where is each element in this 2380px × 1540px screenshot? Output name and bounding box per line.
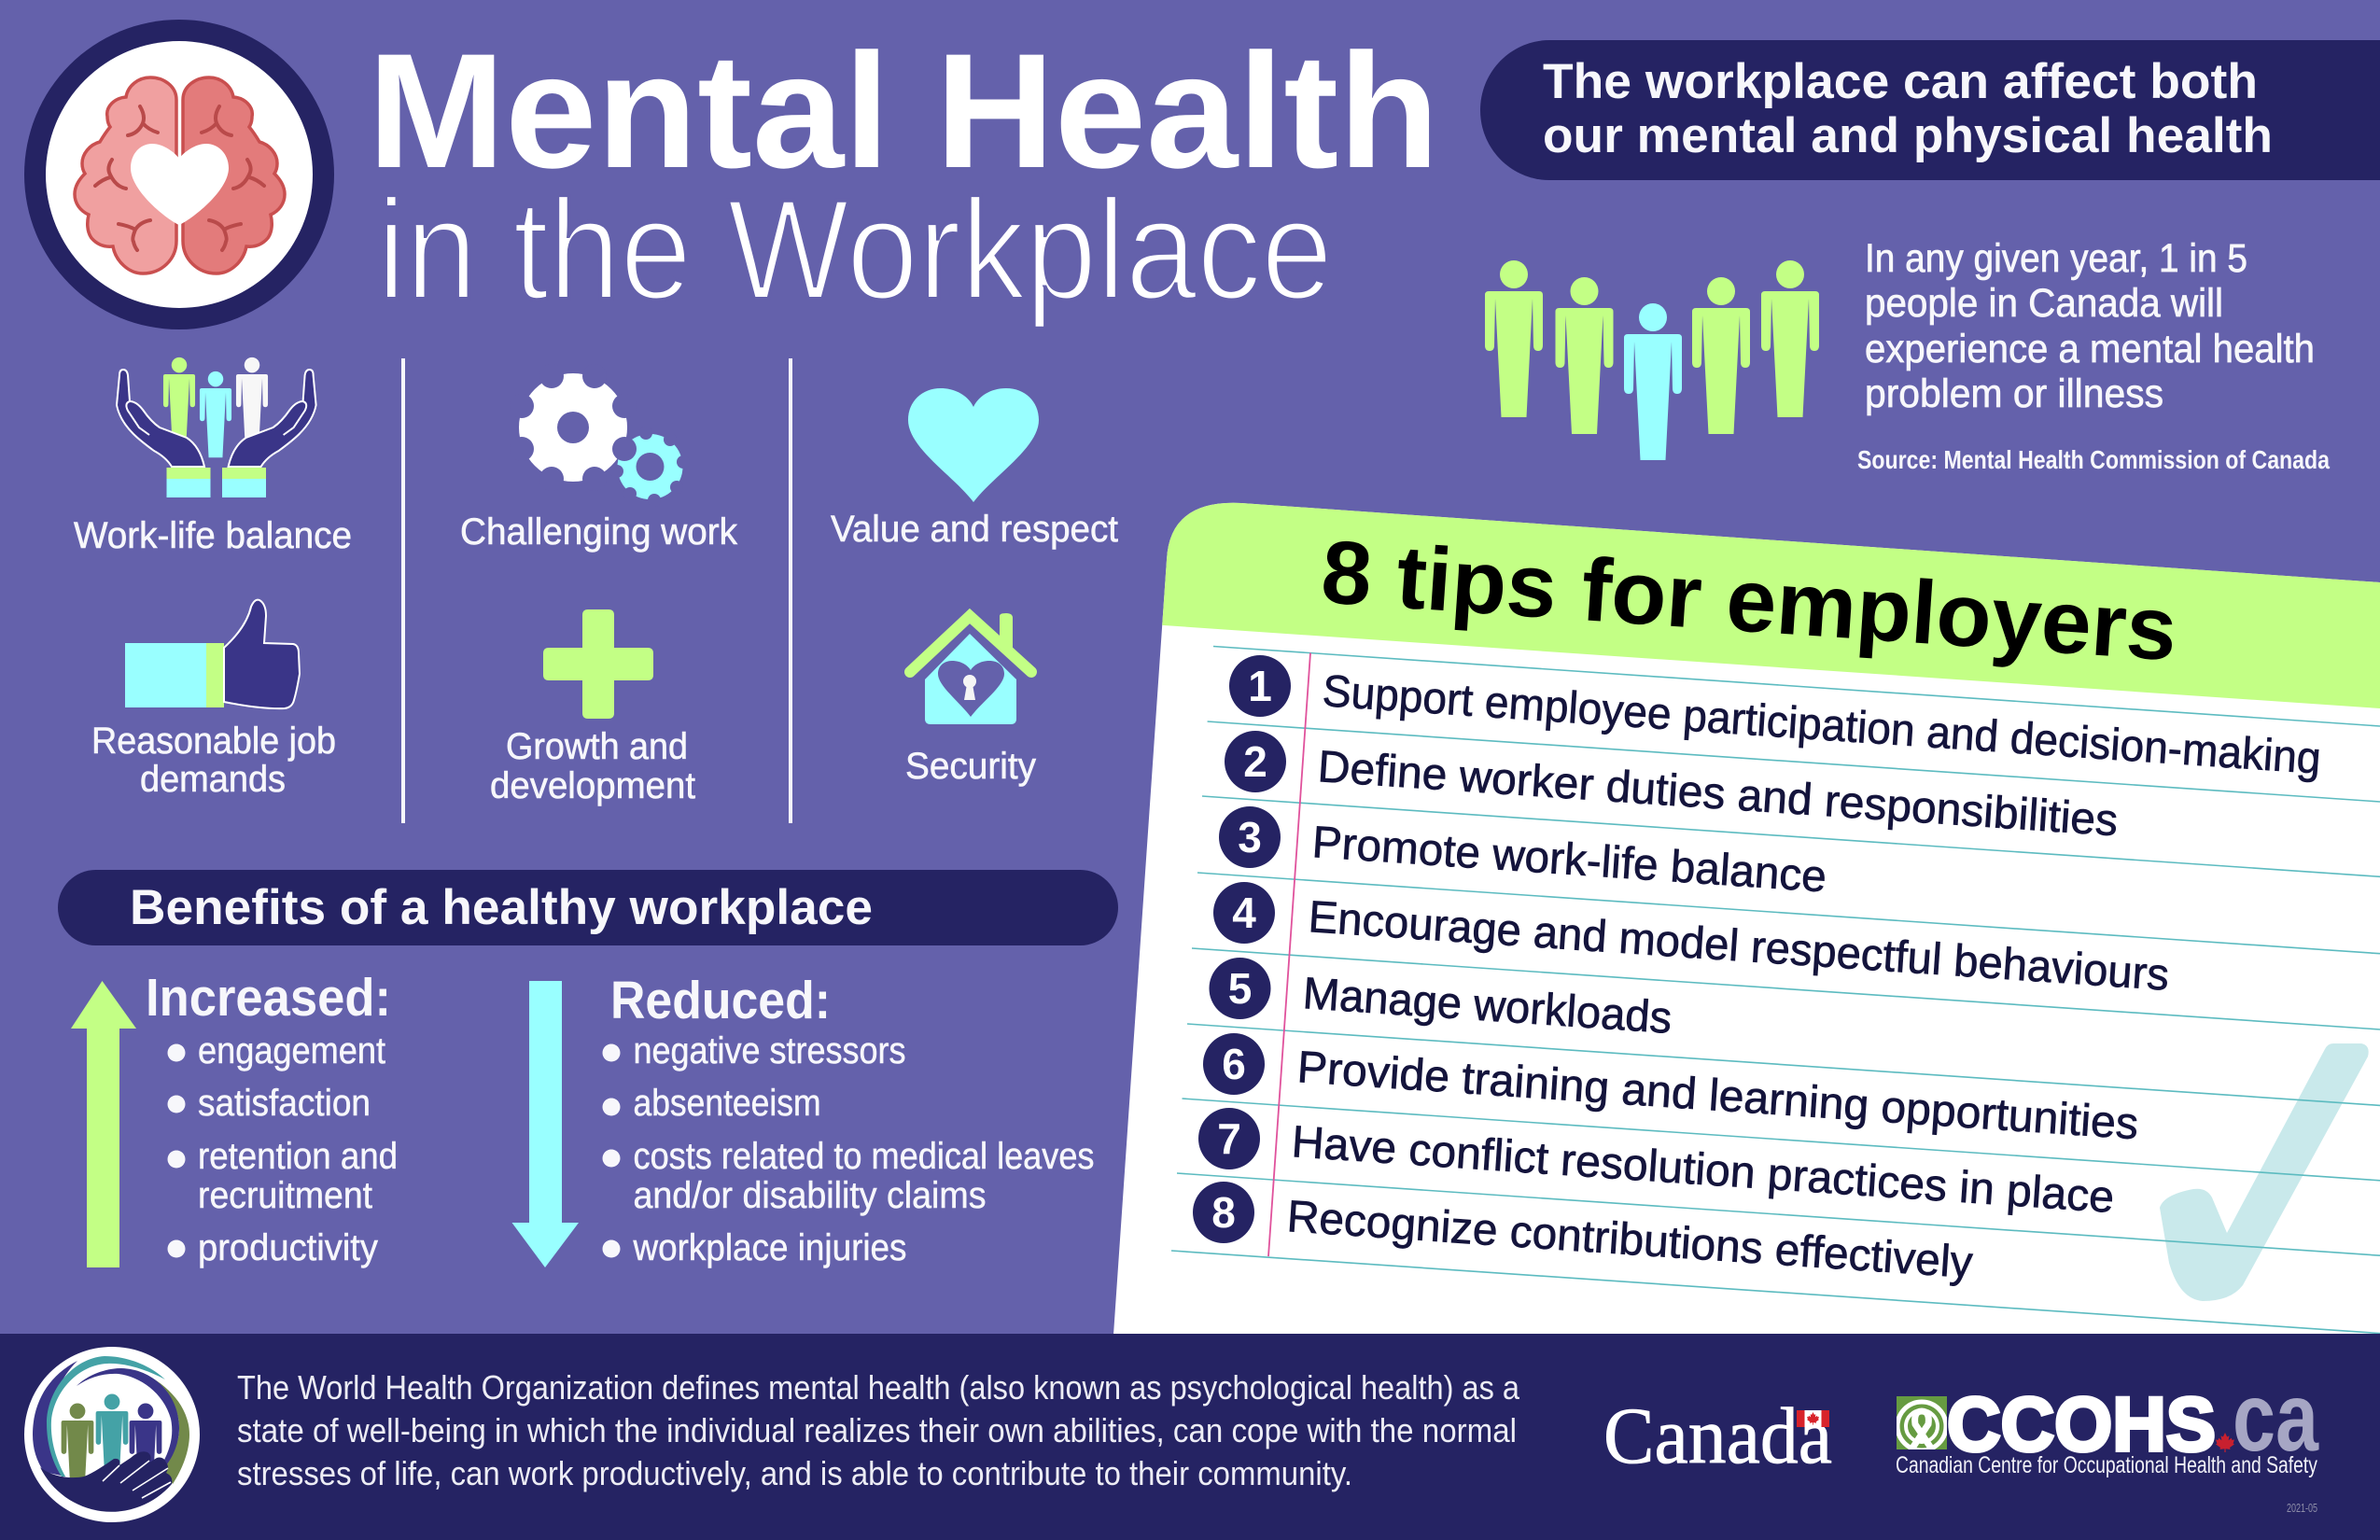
tip 2: Define worker duties and responsibilities [1316,742,2120,846]
list: increased: engagement [198,1030,385,1071]
statistic text [1865,236,2315,416]
list: reduced: Reduced: [610,971,831,1030]
label: security: Security [905,746,1036,787]
list: increased: recruitment [198,1175,372,1216]
icon: gears [510,364,690,507]
logo: Canada wordmark: Canada [1603,1391,1832,1480]
dividers [401,358,405,823]
banner: workplace affects health [1480,40,2380,180]
label: reasonable job demands: Reasonable job [91,721,336,762]
footer definition text: state of well-being in which the individual realizes their own abilities, can cope with the normal [237,1411,1517,1449]
icon: thumbs up [125,600,300,708]
arrow: down [511,981,579,1267]
icon: plus [543,609,653,719]
tip 4: Encourage and model respectful behaviours [1307,892,2171,1001]
label: reasonable job demands [91,721,336,800]
list: increased: Increased: [146,968,391,1028]
list: reduced: workplace injuries [633,1227,907,1268]
label: value and respect: Value and respect [831,509,1118,550]
statistic text: In any given year, 1 in 5 [1865,236,2247,281]
tip 7: 7 [1217,1114,1241,1163]
footer definition text: The World Health Organization defines mental health (also known as psychological health) as a [237,1368,1520,1407]
tip 5: Manage workloads [1301,969,1673,1043]
list: reduced: negative stressors [633,1030,905,1071]
title: Mental Health: Mental Health [368,21,1439,203]
icon: checkmark [2160,1043,2369,1301]
tip 6: 6 [1222,1040,1246,1088]
banner: workplace affects health: our mental and physical health [1543,108,2273,163]
list: increased [146,968,398,1268]
label: challenging work: Challenging work [460,511,738,553]
icon: heart [908,388,1039,502]
label: growth and development: Growth and [506,726,688,767]
logo: CCOHS.ca [1897,1395,2319,1477]
icon: circular people and hand logo [24,1347,200,1522]
heading: benefits of a healthy workplace [58,870,1118,945]
tip 5: 5 [1228,964,1252,1013]
logo: CCOHS.ca: CCOHS [1947,1382,2216,1467]
title: in the Workplace: in the Workplace [377,170,1333,329]
banner: workplace affects health: The workplace can affect both [1543,54,2258,109]
icon: group of five people [1485,260,1819,460]
statistic text: people in Canada will [1865,281,2223,326]
list: reduced: absenteeism [633,1083,821,1124]
logo: CCOHS.ca: ca [2233,1364,2319,1472]
footer band [0,1334,2380,1540]
icon: house with heart and keyhole [910,613,1031,724]
tip 3: 3 [1238,813,1262,861]
label: growth and development [490,726,695,806]
tip 2: 2 [1243,737,1267,786]
tip 1: 1 [1248,662,1272,710]
footer definition text: stresses of life, can work productively, and is able to contribute to their community. [237,1454,1352,1492]
icon: brain in circle [24,20,334,329]
label: growth and development: development [490,765,695,806]
tip 8: 8 [1211,1188,1236,1237]
heading: benefits of a healthy workplace: Benefits of a healthy workplace [130,880,873,935]
list: reduced: and/or disability claims [633,1175,986,1216]
footer definition text [237,1368,1520,1492]
tip 7: Have conflict resolution practices in place [1290,1117,2116,1223]
heading: 8 tips for employers: 8 tips for employers [1319,522,2180,679]
tip 1: Support employee participation and decision-making [1321,666,2322,784]
statistic text: problem or illness [1865,371,2163,416]
label: reasonable job demands: demands [140,759,286,800]
statistic text: experience a mental health [1865,327,2315,371]
label: work-life balance: Work-life balance [74,515,352,556]
arrow: up [71,981,136,1267]
list: increased: retention and [198,1136,398,1177]
date code: 2021-05 [2287,1501,2317,1515]
list: reduced: costs related to medical leaves [633,1136,1094,1177]
list: increased: productivity [198,1227,378,1268]
tip 6: Provide training and learning opportunities [1295,1043,2140,1149]
tip 4: 4 [1232,889,1256,937]
list: increased: satisfaction [198,1083,371,1124]
tip 3: Promote work-life balance [1310,818,1828,903]
tip 5 [1210,958,1673,1043]
tip 8: Recognize contributions effectively [1285,1192,1974,1288]
list: reduced [603,971,1094,1268]
icon: hands holding people [117,357,316,497]
panel: 8 tips notepad [1113,503,2380,1335]
